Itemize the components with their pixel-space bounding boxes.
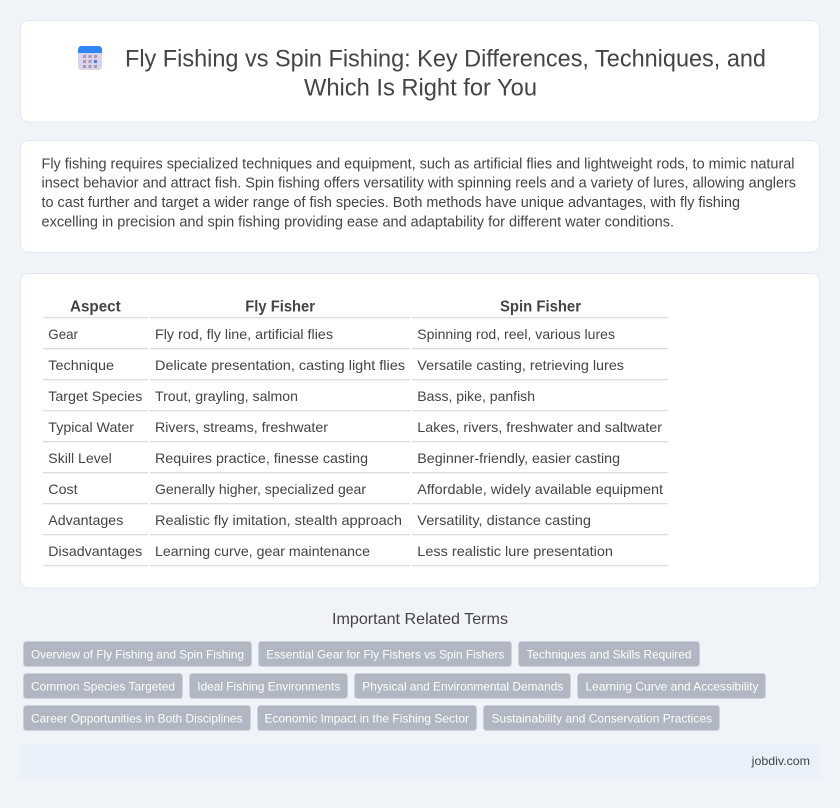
tags: related terms: Overview of Fly Fishing and Spin Fishing bbox=[31, 647, 244, 661]
row: gear bbox=[48, 326, 615, 342]
text block: introduction: Fly fishing requires specialized techniques and equipment, such as artificial flies and lightweight rods, to mimic natural bbox=[42, 156, 794, 172]
row: skill level bbox=[48, 450, 620, 466]
row: technique: Versatile casting, retrieving lures bbox=[417, 357, 624, 373]
row: technique bbox=[48, 357, 624, 373]
row: gear: Fly rod, fly line, artificial flies bbox=[155, 326, 333, 342]
row: disadvantages bbox=[48, 543, 613, 559]
row: typical water: Lakes, rivers, freshwater and saltwater bbox=[417, 419, 662, 435]
text block: introduction bbox=[42, 156, 796, 231]
text block: introduction: excelling in precision and spin fishing providing ease and adaptability for different water conditions. bbox=[42, 215, 674, 231]
row: cost: Cost bbox=[48, 481, 78, 497]
icon: calendar bbox=[78, 46, 102, 70]
row: target species: Bass, pike, panfish bbox=[417, 388, 535, 404]
row: cost bbox=[48, 481, 663, 497]
row: typical water bbox=[48, 419, 662, 435]
row: advantages: Realistic fly imitation, stealth approach bbox=[155, 512, 402, 528]
footer: jobdiv.com bbox=[751, 754, 810, 768]
tags: related terms: Ideal Fishing Environments bbox=[197, 679, 340, 693]
table header row: Aspect bbox=[70, 299, 121, 316]
row: typical water: Typical Water bbox=[48, 419, 134, 435]
row: advantages: Versatility, distance casting bbox=[417, 512, 591, 528]
table header row: Fly Fisher bbox=[245, 299, 315, 316]
heading: important related terms: Important Related Terms bbox=[332, 611, 508, 628]
tags: related terms: Techniques and Skills Required bbox=[526, 647, 692, 661]
row: target species: Trout, grayling, salmon bbox=[155, 388, 298, 404]
footer bbox=[20, 744, 820, 778]
table header row bbox=[70, 299, 581, 316]
title: Fly Fishing vs Spin Fishing: Key Differences, Techniques, and bbox=[125, 46, 766, 73]
title: Which Is Right for You bbox=[304, 75, 537, 102]
panel: introduction bbox=[20, 140, 820, 252]
row: disadvantages: Disadvantages bbox=[48, 543, 142, 559]
row: typical water: Rivers, streams, freshwater bbox=[155, 419, 328, 435]
tags: related terms: Essential Gear for Fly Fishers vs Spin Fishers bbox=[266, 647, 504, 661]
row: skill level: Skill Level bbox=[48, 450, 112, 466]
row: technique: Technique bbox=[48, 357, 114, 373]
row: target species: Target Species bbox=[48, 388, 142, 404]
panel: comparison table bbox=[20, 274, 820, 588]
text block: introduction: insect behavior and attract fish. Spin fishing offers versatility with spinning reels and a variety of lures, allowing anglers bbox=[42, 176, 796, 192]
row: cost: Generally higher, specialized gear bbox=[155, 481, 366, 497]
row: advantages bbox=[48, 512, 591, 528]
row: disadvantages: Learning curve, gear maintenance bbox=[155, 543, 370, 559]
tags: related terms: Sustainability and Conservation Practices bbox=[492, 711, 712, 725]
row: advantages: Advantages bbox=[48, 512, 123, 528]
row: technique: Delicate presentation, casting light flies bbox=[155, 357, 405, 373]
title bbox=[125, 46, 766, 102]
row: gear: Spinning rod, reel, various lures bbox=[417, 326, 615, 342]
row: skill level: Requires practice, finesse casting bbox=[155, 450, 368, 466]
row: target species bbox=[48, 388, 535, 404]
tags: related terms: Career Opportunities in Both Disciplines bbox=[31, 711, 242, 725]
tags: related terms: Physical and Environmental Demands bbox=[362, 679, 563, 693]
tags: related terms bbox=[24, 642, 766, 730]
text block: introduction: to cast further and target a wider range of fish species. Both methods have unique advantages, with fly fishing bbox=[42, 195, 740, 211]
row: cost: Affordable, widely available equipment bbox=[417, 481, 663, 497]
tags: related terms: Learning Curve and Accessibility bbox=[586, 679, 758, 693]
row: gear: Gear bbox=[48, 326, 78, 342]
panel: header bbox=[20, 20, 820, 122]
row: disadvantages: Less realistic lure presentation bbox=[417, 543, 613, 559]
table header row: Spin Fisher bbox=[500, 299, 581, 316]
tags: related terms: Common Species Targeted bbox=[31, 679, 175, 693]
tags: related terms: Economic Impact in the Fishing Sector bbox=[264, 711, 469, 725]
row: skill level: Beginner-friendly, easier casting bbox=[417, 450, 620, 466]
